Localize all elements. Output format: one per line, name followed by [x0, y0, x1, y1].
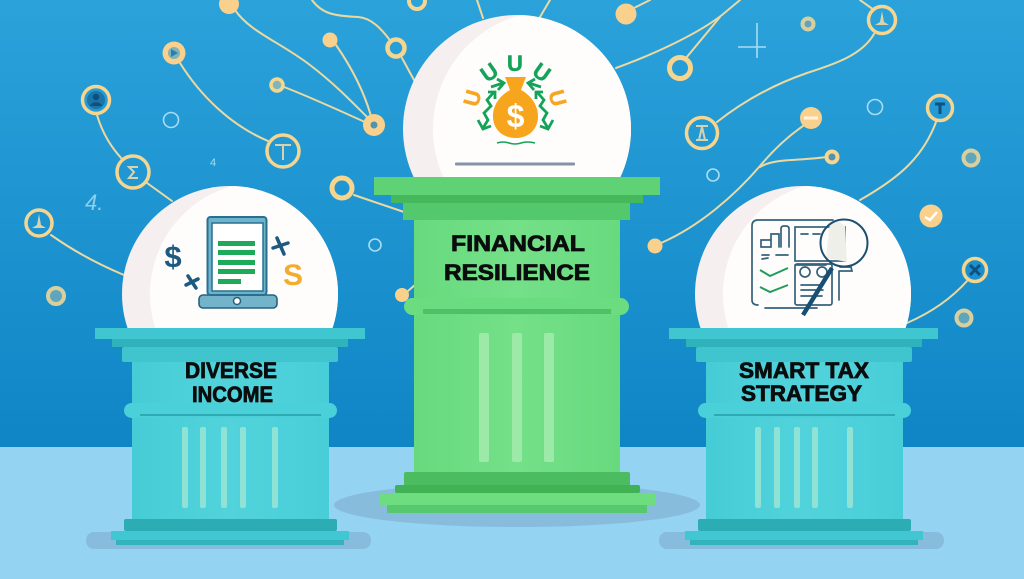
label: smart tax strategy: STRATEGY [741, 381, 862, 406]
label: smart tax strategy: SMART TAX [739, 358, 869, 383]
node: faint ring [956, 310, 972, 326]
node: hub [363, 114, 385, 136]
pedestal capital [374, 177, 660, 220]
background sky [0, 0, 1024, 448]
icon: tablet with currency [164, 217, 303, 308]
icon: tablet with currency: S [283, 259, 303, 292]
panel: diverse income pedestal [95, 182, 374, 545]
label: diverse income: DIVERSE [185, 358, 277, 383]
icon: money bag with arrows: U [528, 58, 555, 87]
pedestal capital [95, 328, 365, 362]
pedestal column [404, 220, 629, 472]
label: financial resilience [444, 231, 590, 285]
node: sigma [117, 156, 149, 188]
floor [0, 447, 1024, 579]
sphere [122, 186, 338, 328]
pedestal base [380, 472, 655, 513]
node: ring [670, 58, 690, 78]
node: pale ring [868, 100, 882, 114]
sphere [403, 15, 631, 177]
flutes [182, 427, 278, 508]
node: pin [868, 6, 896, 34]
pedestal column [698, 362, 911, 519]
node: ring [388, 40, 404, 56]
pedestal base [685, 519, 923, 545]
node: hourglass [686, 118, 718, 148]
node: pale ring lower [369, 239, 381, 251]
floor shadows [86, 483, 944, 549]
pedestal column [124, 362, 337, 519]
icon: money bag with arrows: U [476, 58, 503, 87]
icon: money bag with arrows: U [458, 87, 487, 109]
node: minus [800, 107, 822, 129]
icon: tax documents with magnifier [752, 220, 868, 315]
icon: money bag with arrows [458, 51, 572, 144]
node: top ring [409, 0, 425, 9]
icon: tablet with currency: $ [164, 239, 182, 274]
sketch mark: 4. [85, 190, 103, 215]
node: person [82, 86, 110, 114]
panel: smart tax strategy pedestal [669, 182, 947, 545]
plus mark [738, 23, 766, 58]
node: pale ring [164, 112, 178, 128]
node: check [920, 204, 942, 228]
sketch mark: 4 [210, 157, 216, 169]
node: pale ring [707, 169, 719, 181]
label: financial resilience: RESILIENCE [444, 260, 590, 285]
node: X [964, 258, 986, 282]
node: small ring [826, 152, 838, 162]
node: T [267, 135, 299, 167]
node: faint ring [48, 288, 64, 304]
node: filled [616, 4, 636, 24]
divider line [455, 162, 575, 166]
node: pin [26, 210, 52, 236]
pedestal capital [669, 328, 938, 362]
node: T dark [928, 96, 952, 120]
network: left connectors and nodes [26, 0, 425, 304]
flutes [479, 333, 554, 462]
icon: money bag with arrows: U [543, 87, 572, 109]
pedestal base [111, 519, 349, 545]
node: top filled [219, 0, 239, 14]
node: play [162, 42, 186, 64]
label: diverse income: INCOME [192, 382, 273, 407]
node: small ring [271, 79, 283, 91]
icon: money bag with arrows: $ [507, 98, 525, 134]
flutes [755, 427, 853, 508]
network: right connectors and nodes [477, 0, 986, 326]
node: faint ring [802, 18, 814, 30]
label: smart tax strategy [739, 358, 869, 406]
icon: money bag with arrows: U [507, 51, 523, 76]
node: filled [648, 238, 662, 254]
label: diverse income [185, 358, 277, 407]
sphere [695, 186, 911, 328]
panel: financial resilience pedestal [374, 11, 669, 513]
label: financial resilience: FINANCIAL [451, 231, 585, 256]
node: faint ring [964, 150, 978, 166]
node: small filled [322, 32, 338, 48]
node: filled near pedestal [395, 288, 409, 302]
node: ring near pedestal [332, 178, 352, 198]
